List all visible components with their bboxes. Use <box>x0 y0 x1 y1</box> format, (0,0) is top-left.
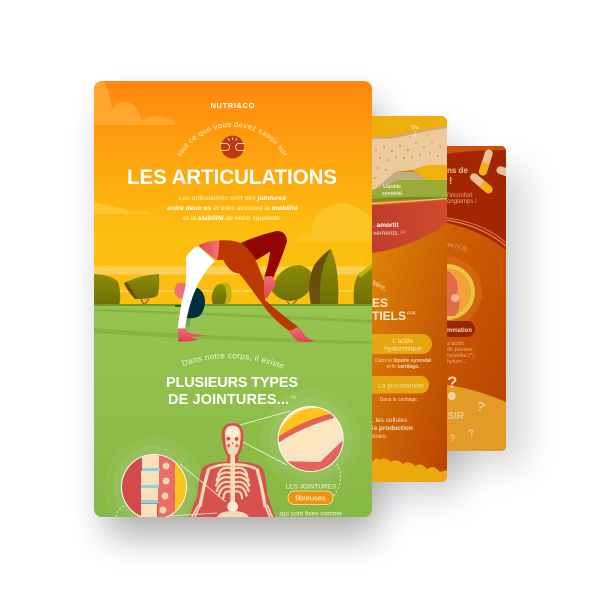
question marks: ? <box>447 373 457 392</box>
text: cells production <box>372 418 412 438</box>
grass ground <box>94 305 372 517</box>
pill: glucosamine: La glucosamine <box>378 382 424 390</box>
body fragments: l'inconfort <box>447 193 473 199</box>
heading: types: PLUSIEURS TYPES <box>166 375 298 391</box>
text: amortit <box>373 222 406 235</box>
panel: back card: es (7,8) <box>447 242 468 253</box>
sky stripes <box>94 266 372 292</box>
pill: inflammation: mmation <box>447 328 472 334</box>
skeleton <box>189 423 275 519</box>
connector lines <box>170 411 290 516</box>
text: cells production: la production <box>372 425 413 432</box>
bone section <box>372 128 447 190</box>
ribs <box>216 468 249 498</box>
head <box>174 283 187 299</box>
grey cartilage triangle <box>376 172 428 188</box>
label: liquide synovial: Liquide <box>383 184 401 190</box>
pill: fibreuses <box>288 491 333 504</box>
heading fragment <box>372 298 416 320</box>
skull <box>225 426 241 454</box>
top yellow band <box>372 116 447 137</box>
pill: inflammation <box>447 321 475 337</box>
text: location acid: Dans le liquide synovial <box>375 358 432 364</box>
text: fixed joints: qui sont fixes comme <box>280 510 342 518</box>
text: active plants: oswellia (*), <box>447 353 476 359</box>
panel: back card: ongtemps ! <box>447 199 477 205</box>
text: location acid: et le cartilage. <box>387 364 420 370</box>
yellow cartilage patch <box>412 165 447 180</box>
label: les jointures: LES JOINTURES <box>286 484 337 490</box>
red membrane band <box>372 200 447 253</box>
text: amortit: (1) <box>399 229 406 234</box>
question marks: ? <box>467 428 476 440</box>
label: Os <box>411 125 419 137</box>
synovial fluid band <box>372 180 447 199</box>
brand: NUTRI&CO <box>210 101 255 110</box>
circle: fibrous joint detail <box>278 406 345 475</box>
intro text <box>167 195 298 222</box>
pill: fibreuses: fibreuses <box>295 494 326 502</box>
lower curved text: Dans notre corps, il existe <box>182 354 284 368</box>
heading fragment: (2,3) <box>406 310 416 315</box>
figure: yoga pose <box>174 231 314 342</box>
sky background <box>94 81 372 306</box>
cloud: mid left <box>94 202 150 214</box>
text: amortit: vements. <box>373 230 399 237</box>
text: active plants: de plantes : <box>447 347 476 353</box>
rear foot <box>289 327 314 342</box>
spine <box>230 454 235 513</box>
question marks: ? <box>450 433 456 443</box>
bone pores <box>374 134 441 179</box>
cloud: top left <box>94 81 177 125</box>
heading: types: DE JOINTURES... <box>168 392 289 408</box>
heading fragment: ES <box>372 296 388 310</box>
intro text: et la stabilité de notre squelette. <box>183 215 282 222</box>
panel: middle card <box>372 116 447 482</box>
clavicle and arms <box>191 465 273 519</box>
intro text: Les articulations sont des jointures <box>179 195 286 202</box>
text: amortit: , amortit <box>373 222 399 229</box>
scalloped bottom <box>372 458 447 482</box>
text: active plants <box>447 341 476 365</box>
text: cells production: , les cellules <box>372 417 408 424</box>
hands <box>178 328 205 342</box>
text: curved fragment: laire, <box>371 280 388 293</box>
icon: joint <box>220 136 245 158</box>
cloud: right <box>295 203 372 242</box>
text: active plants: hytum... <box>447 359 467 365</box>
intro text: entre deux os et elles assurent la mobilité <box>167 205 298 212</box>
body silhouette <box>189 423 275 518</box>
orange circle background <box>447 223 506 451</box>
pill: acide hyaluronique: L'acide <box>393 338 414 345</box>
text: location glucosamine: Dans le cartilage. <box>380 397 418 403</box>
question marks <box>447 376 485 441</box>
back leg <box>240 231 287 278</box>
drop shadows <box>106 104 525 536</box>
label: liquide synovial: synovial <box>382 191 403 197</box>
pill: glucosamine <box>372 376 429 394</box>
heading: types <box>166 375 298 408</box>
question marks: ? <box>475 398 487 415</box>
white top <box>178 246 215 328</box>
trees <box>94 249 372 306</box>
halos <box>104 389 361 537</box>
panel: front card <box>94 81 372 517</box>
title: LES ARTICULATIONS <box>127 165 337 189</box>
circle: spine joint detail <box>120 454 190 520</box>
heading: types: (1) <box>291 394 297 399</box>
front leg <box>217 240 298 331</box>
hair <box>186 288 205 318</box>
hips <box>198 240 219 260</box>
upper foot <box>264 276 275 299</box>
infographic stack of three cards <box>84 81 540 558</box>
text: active plants: s actifs <box>447 341 464 347</box>
text: cells production: oses. <box>372 433 388 440</box>
dashed connectors <box>116 464 341 517</box>
knee illustration <box>447 257 482 321</box>
bottom yellow section <box>447 384 506 451</box>
top orange strip <box>447 146 506 154</box>
panel: back card <box>447 146 506 451</box>
pill: acide hyaluronique <box>372 334 432 354</box>
curved subtitle: tout ce que vous devez savoir sur <box>177 122 288 156</box>
text: location acid <box>375 358 432 370</box>
icon: capsules <box>470 149 506 194</box>
question marks: SIR <box>447 411 464 422</box>
label: liquide synovial <box>382 184 402 196</box>
panel: back card: ! <box>449 176 452 187</box>
arm lower <box>185 318 191 327</box>
pelvis <box>217 511 249 518</box>
lumbar joint <box>228 502 238 512</box>
heading fragment: TIELS <box>372 309 406 323</box>
heading fragments: ns de <box>447 166 468 175</box>
label: Os: Os <box>411 125 419 131</box>
pill: acide hyaluronique: hyaluronique <box>384 346 422 352</box>
